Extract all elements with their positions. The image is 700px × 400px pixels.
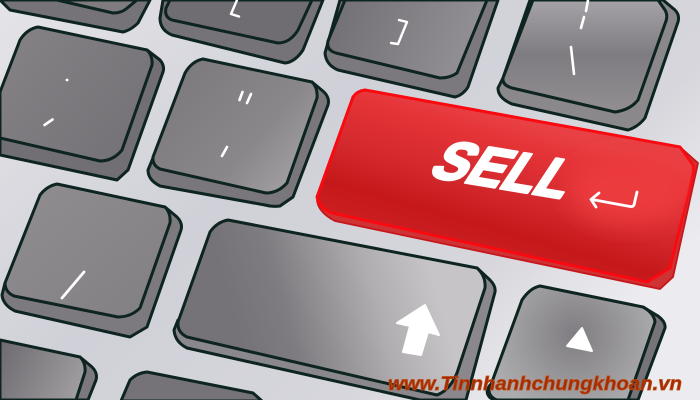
- glyph: bracket: [231, 0, 239, 16]
- key: semicolon: [0, 27, 164, 180]
- key: SELL: [317, 90, 698, 289]
- red key highlight: [568, 156, 692, 224]
- watermark: www.Tinnhanhchungkhoan.vn: [388, 374, 682, 395]
- key: slash: [2, 184, 182, 337]
- icon: triangle: [567, 328, 592, 351]
- SELL label: SELL: [420, 131, 591, 210]
- glyph: semicolon: [44, 80, 67, 125]
- key: shift: [174, 220, 495, 400]
- red key side: [317, 147, 698, 289]
- key: quote: [148, 59, 328, 206]
- key: top-left: [0, 0, 150, 32]
- red key face: [317, 90, 693, 282]
- key: left bracket: [160, 0, 323, 63]
- key: top-right: [498, 0, 679, 130]
- glyph: quote marks: [222, 92, 251, 156]
- icon: up arrow: [397, 305, 439, 355]
- glyph: bracket: [391, 20, 407, 44]
- icon: enter arrow: [591, 192, 637, 207]
- key: right bracket: [325, 0, 498, 97]
- key: bottom-left: [0, 340, 96, 400]
- key: up triangle: [487, 286, 665, 400]
- glyph: exclamation marks: [571, 0, 588, 74]
- key: bottom-middle: [121, 372, 262, 400]
- glyph: slash: [62, 272, 84, 298]
